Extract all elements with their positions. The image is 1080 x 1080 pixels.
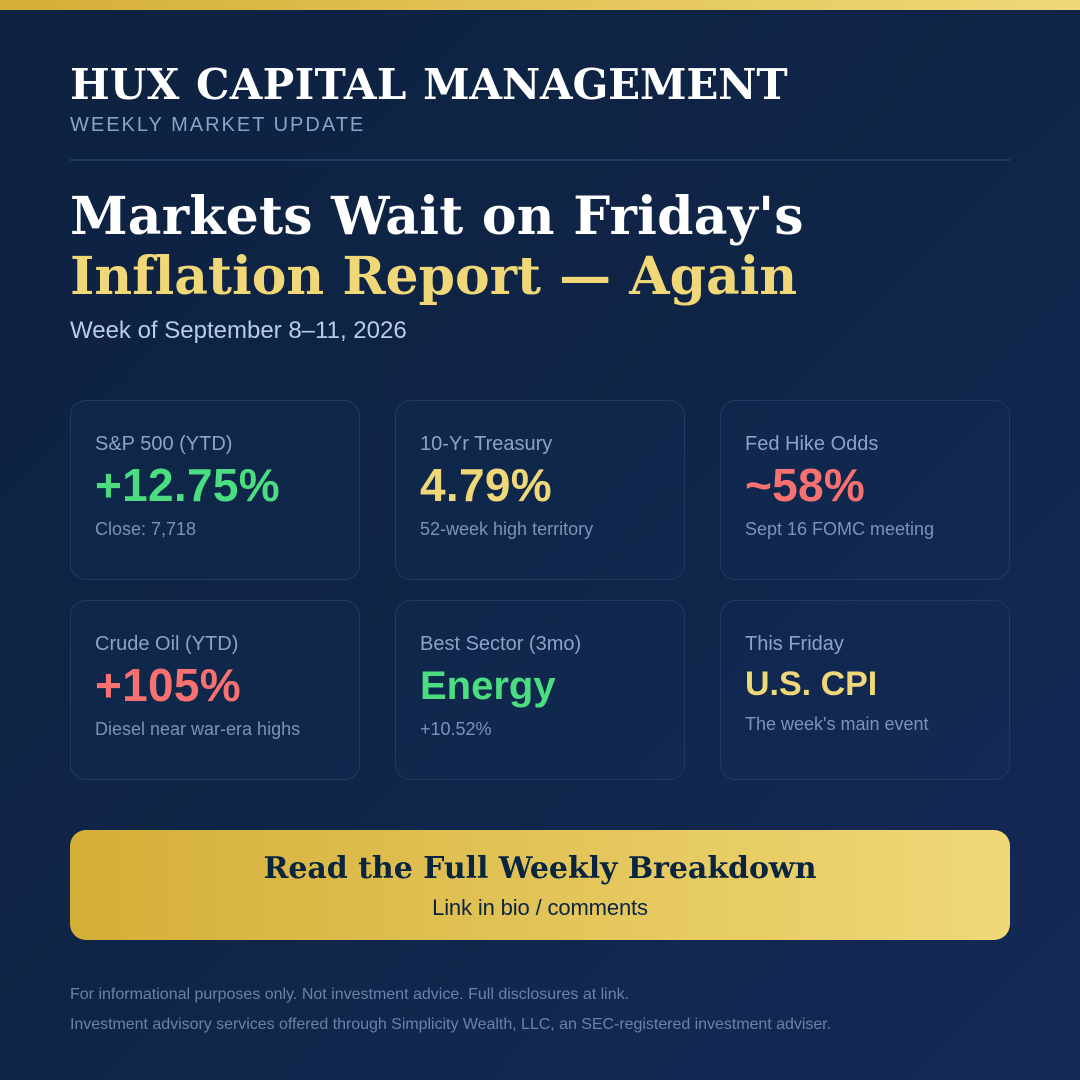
card: Best Sector: +10.52%	[420, 719, 492, 739]
card: Crude Oil: +105%	[95, 659, 241, 711]
card: 10-Yr Treasury: 52-week high territory	[420, 519, 593, 539]
header: subtitle: WEEKLY MARKET UPDATE	[70, 114, 365, 136]
card: S&P 500: Close: 7,718	[95, 519, 196, 539]
CTA banner	[70, 830, 1010, 940]
card: S&P 500	[70, 400, 360, 580]
card: Fed Hike Odds: Fed Hike Odds	[745, 433, 878, 455]
card: Best Sector	[395, 600, 685, 780]
headline: Inflation Report — Again	[70, 246, 797, 307]
date line: Week of September 8–11, 2026	[70, 317, 407, 344]
top gold bar	[0, 0, 1080, 10]
card: Fed Hike Odds: Sept 16 FOMC meeting	[745, 519, 934, 539]
card: Crude Oil	[70, 600, 360, 780]
card: Best Sector: Best Sector (3mo)	[420, 633, 581, 655]
card: Fed Hike Odds: ~58%	[745, 459, 865, 511]
divider	[70, 159, 1010, 161]
card: 10-Yr Treasury: 4.79%	[420, 459, 552, 511]
card: This Friday: U.S. CPI	[745, 665, 877, 703]
CTA heading: Read the Full Weekly Breakdown	[264, 851, 816, 886]
card: 10-Yr Treasury: 10-Yr Treasury	[420, 433, 552, 455]
header: firm name: HUX CAPITAL MANAGEMENT	[70, 60, 787, 109]
disclaimer: Investment advisory services offered through Simplicity Wealth, LLC, an SEC-registered investment adviser.	[70, 1016, 831, 1033]
card: Fed Hike Odds	[720, 400, 1010, 580]
card: Crude Oil: Crude Oil (YTD)	[95, 633, 238, 655]
disclaimer: For informational purposes only. Not investment advice. Full disclosures at link.	[70, 986, 629, 1003]
card: This Friday	[720, 600, 1010, 780]
card: S&P 500: S&P 500 (YTD)	[95, 433, 232, 455]
card: This Friday: This Friday	[745, 633, 844, 655]
card: Crude Oil: Diesel near war-era highs	[95, 719, 300, 739]
headline	[70, 186, 804, 307]
card: Best Sector: Energy	[420, 664, 556, 708]
card: 10-Yr Treasury	[395, 400, 685, 580]
card: S&P 500: +12.75%	[95, 459, 280, 511]
disclaimer	[70, 986, 831, 1033]
headline: Markets Wait on Friday's	[70, 186, 804, 247]
card: This Friday: The week's main event	[745, 714, 929, 734]
CTA subtext: Link in bio / comments	[432, 895, 648, 920]
